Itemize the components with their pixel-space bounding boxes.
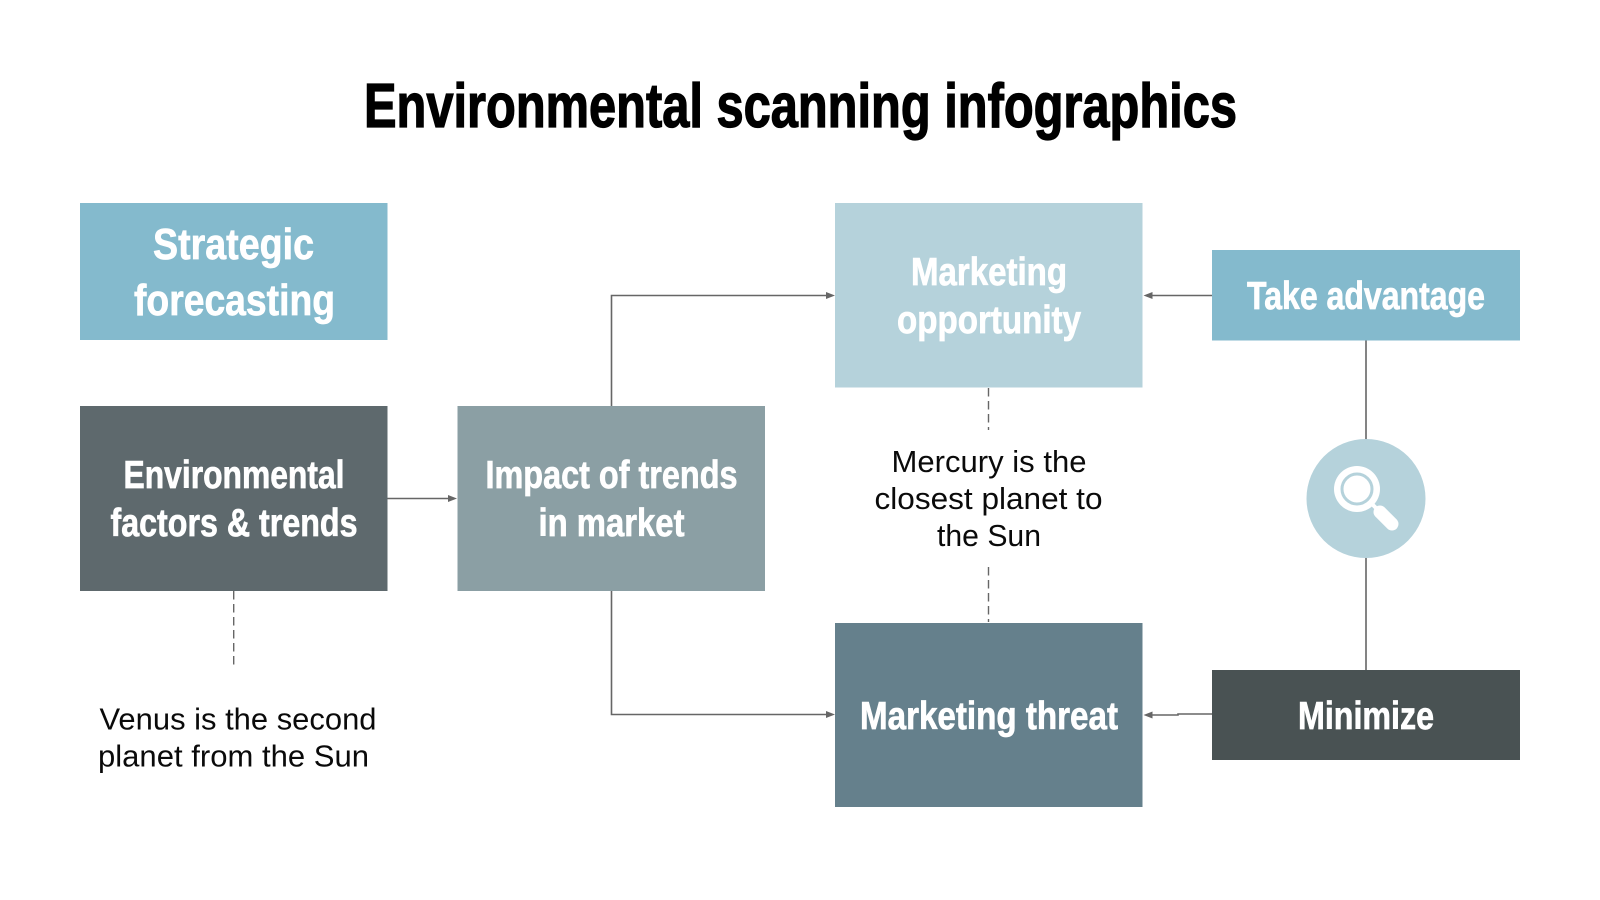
- text: Venus description: [98, 702, 376, 774]
- connector: take advantage to minimize: [1365, 340, 1367, 670]
- arrow: take advantage to marketing opportunity: [1144, 292, 1212, 299]
- panel: impact of trends in market: in market: [538, 502, 685, 545]
- title: Environmental scanning infographics: [364, 72, 1237, 141]
- panel: environmental factors and trends: Environmental: [124, 454, 344, 497]
- arrow: minimize to marketing threat: [1144, 712, 1212, 718]
- dashed connector: marketing opportunity to Mercury text: [988, 388, 990, 430]
- panel: impact of trends in market: [458, 406, 765, 591]
- dashed connector: Mercury text to marketing threat: [988, 567, 990, 622]
- text: Venus description: Venus is the second: [100, 702, 376, 736]
- panel: environmental factors and trends: factors & trends: [110, 502, 358, 545]
- text: Mercury description: [874, 444, 1102, 553]
- arrow: environmental factors to impact: [388, 495, 457, 502]
- panel: strategic forecasting: forecasting: [134, 276, 335, 325]
- panel: take advantage: [1212, 250, 1520, 340]
- panel: take advantage: Take advantage: [1247, 275, 1485, 318]
- icon: magnifying glass in circle: [1306, 439, 1426, 558]
- text: Mercury description: Mercury is the: [892, 444, 1086, 479]
- panel: marketing opportunity: Marketing: [911, 251, 1067, 294]
- text: Venus description: planet from the Sun: [98, 738, 369, 774]
- panel: impact of trends in market: Impact of trends: [486, 454, 738, 497]
- dashed connector: environmental factors to Venus text: [233, 591, 235, 667]
- panel: marketing opportunity: opportunity: [897, 299, 1081, 342]
- panel: minimize: [1212, 670, 1520, 760]
- panel: strategic forecasting: Strategic: [153, 220, 314, 269]
- panel: marketing threat: [835, 623, 1142, 807]
- panel: minimize: Minimize: [1298, 695, 1434, 738]
- text: Mercury description: the Sun: [937, 518, 1041, 553]
- panel: strategic forecasting: [80, 203, 388, 340]
- arrow: impact to marketing threat: [612, 590, 835, 718]
- panel: environmental factors and trends: [80, 406, 388, 591]
- arrow: impact to marketing opportunity: [612, 292, 835, 406]
- panel: marketing opportunity: [835, 203, 1142, 388]
- panel: marketing threat: Marketing threat: [860, 695, 1118, 738]
- text: Mercury description: closest planet to: [874, 481, 1102, 516]
